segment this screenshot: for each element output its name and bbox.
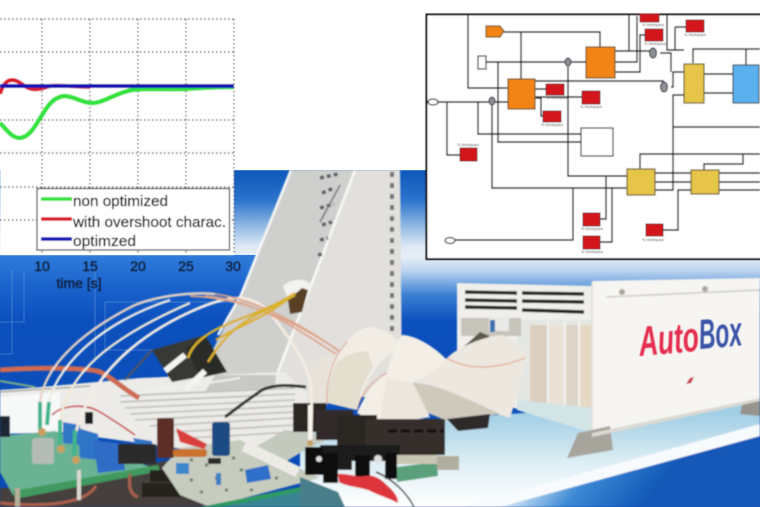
white band above backdrop: [234, 0, 760, 170]
blue trim block: [245, 465, 271, 483]
legend: [37, 188, 230, 250]
red signal wire: [52, 406, 135, 435]
blue gradient backdrop: [0, 170, 760, 507]
x axis labels: 20: [130, 258, 146, 274]
right circuit board: [162, 430, 345, 507]
black connector stack: [293, 403, 459, 507]
sum junctions: [489, 48, 668, 105]
x axis labels: 30: [225, 258, 241, 274]
panel: simulink block diagram: [426, 14, 760, 259]
card slots: [517, 320, 593, 433]
table surface: [300, 395, 760, 507]
legend: with overshoot charac.: [72, 214, 226, 231]
plot background: [0, 0, 234, 255]
block captions: [457, 23, 706, 254]
cable below clamp: [376, 472, 414, 507]
faint circuit pattern: [0, 270, 240, 360]
brown capacitor: [157, 418, 174, 458]
photo: hardware test bench: [0, 170, 760, 507]
solder joints: [38, 428, 313, 464]
x axis labels: time [s]: [56, 275, 102, 291]
blue capacitor: [212, 422, 230, 456]
black probe cable: [225, 385, 306, 417]
block captions: To Workspace: [642, 238, 664, 242]
block captions: To Workspace: [457, 143, 479, 147]
block captions: To Workspace: [580, 105, 602, 109]
block captions: To Workspace: [644, 42, 666, 46]
logo mark: [686, 377, 694, 384]
auto box logo: Auto: [636, 313, 701, 365]
red clip: [176, 428, 207, 449]
ventilation slats: [465, 292, 584, 312]
x axis labels: 15: [82, 258, 98, 274]
block captions: To Workspace: [684, 33, 706, 37]
curve: with overshoot: [0, 80, 90, 94]
ribbon cables: [307, 327, 527, 431]
sensor block: [125, 335, 240, 392]
white header strip: [244, 446, 298, 472]
metal mast: [205, 170, 402, 400]
blue trimmer blocks: [63, 412, 156, 473]
diagram frame: [426, 14, 760, 259]
feet: [567, 426, 613, 458]
curve: optimized: [0, 84, 234, 88]
x axis labels: [34, 258, 241, 291]
tan power cable: [0, 368, 139, 398]
block captions: To Workspace: [581, 250, 603, 254]
auto box unit: [457, 278, 760, 458]
block captions: To Workspace: [541, 123, 563, 127]
red clamp: [338, 474, 398, 503]
legend: non optimized: [73, 193, 168, 210]
block captions: To Workspace: [581, 227, 603, 231]
orange blocks: [486, 26, 615, 109]
orange component: [173, 449, 207, 457]
looping signal wires: [40, 293, 340, 456]
io card connectors: [460, 317, 521, 356]
white blocks: [428, 56, 613, 244]
curve: non optimized: [0, 87, 234, 138]
red scope blocks: [460, 14, 704, 249]
x axis labels: 25: [178, 258, 194, 274]
box side panel: [592, 278, 760, 433]
blue block: [733, 65, 759, 103]
heat-sink rack: [0, 372, 312, 452]
plot grid: [0, 19, 234, 255]
panel: response chart: [0, 0, 760, 291]
left circuit board: [0, 416, 215, 507]
yellow twisted wires: [188, 293, 295, 362]
box front panel: [457, 283, 593, 433]
deeper blue behind chart axis: [0, 255, 300, 325]
block captions: To Workspace: [546, 96, 568, 100]
x axis labels: 10: [34, 258, 50, 274]
green sleeves: [40, 402, 75, 456]
block captions: To Workspace: [642, 23, 664, 27]
signal wires: [438, 14, 760, 242]
yellow blocks: [627, 64, 719, 195]
legend: optimzed: [73, 233, 136, 250]
